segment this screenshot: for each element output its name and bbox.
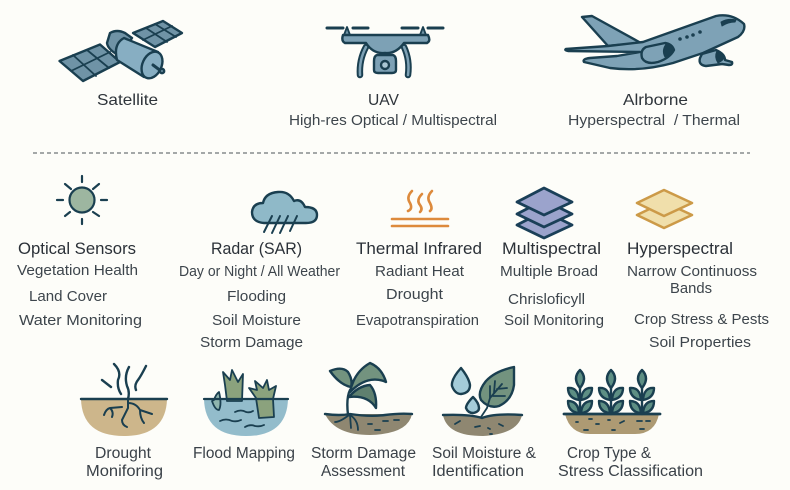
icon: flood mapping — [204, 370, 288, 436]
label: airborne: Alrborne — [623, 92, 688, 109]
label: storm damage assessment — [311, 445, 416, 480]
label: drought monitoring: Moniforing — [86, 463, 163, 480]
icon: UAV drone — [327, 27, 443, 75]
column: optical sensors: Land Cover — [29, 288, 107, 305]
text: UAV sensors: High-res Optical / Multispectral — [289, 112, 497, 129]
column: radar: Radar (SAR) — [211, 239, 302, 258]
icon: crop rows — [564, 370, 660, 434]
icon: thermal heat — [392, 191, 448, 226]
column: hyperspectral: Hyperspectral — [627, 239, 733, 258]
label: crop type and stress classification: Stress Classification — [558, 463, 703, 480]
icon: sun — [57, 176, 107, 224]
column: hyperspectral: Narrow Continuoss — [627, 263, 757, 280]
column: multispectral — [500, 239, 604, 329]
text: airborne sensors: Hyperspectral / Thermal — [568, 112, 740, 129]
column: optical sensors: Vegetation Health — [17, 262, 138, 279]
column: optical sensors: Water Monitoring — [19, 312, 142, 329]
icon: soil moisture — [443, 367, 522, 436]
label: drought monitoring — [86, 445, 163, 480]
label: UAV: UAV — [368, 92, 399, 109]
label: soil moisture and identification: Soil Moisture & — [432, 445, 537, 462]
column: thermal infrared — [356, 239, 482, 329]
label: drought monitoring: Drought — [95, 445, 152, 462]
label: crop type and stress classification — [558, 445, 703, 480]
column: radar — [179, 239, 340, 351]
column: radar: Day or Night / All Weather — [179, 263, 340, 280]
column: thermal infrared: Thermal Infrared — [356, 239, 482, 258]
column: multispectral: Chrisloficyll — [508, 291, 585, 308]
icon: hyperspectral layers — [637, 190, 692, 228]
icon: satellite — [60, 21, 182, 82]
label: soil moisture and identification — [432, 445, 537, 480]
column: hyperspectral — [627, 239, 769, 351]
column: radar: Soil Moisture — [212, 312, 301, 329]
column: optical sensors — [17, 239, 142, 329]
label: soil moisture and identification: Identification — [432, 463, 524, 480]
label: storm damage assessment: Assessment — [321, 463, 406, 480]
column: multispectral: Multispectral — [502, 239, 601, 258]
column: thermal infrared: Evapotranspiration — [356, 312, 479, 329]
column: thermal infrared: Radiant Heat — [375, 263, 465, 280]
column: radar: Storm Damage — [200, 334, 303, 351]
label: storm damage assessment: Storm Damage — [311, 445, 416, 462]
icon: rain cloud — [252, 192, 317, 233]
label: flood mapping: Flood Mapping — [193, 445, 295, 462]
icon: airborne plane — [565, 15, 744, 69]
label: satellite: Satellite — [97, 92, 158, 109]
column: hyperspectral: Crop Stress & Pests — [634, 311, 769, 328]
column: multispectral: Soil Monitoring — [504, 312, 604, 329]
column: radar: Flooding — [227, 288, 286, 305]
column: hyperspectral: Bands — [670, 280, 712, 297]
column: thermal infrared: Drought — [386, 286, 444, 303]
label: crop type and stress classification: Crop Type & — [567, 445, 652, 462]
column: multispectral: Multiple Broad — [500, 263, 598, 280]
column: hyperspectral: Soil Properties — [649, 334, 751, 351]
icon: multispectral layers — [517, 188, 572, 238]
column: optical sensors: Optical Sensors — [18, 239, 136, 258]
icon: storm damage plant — [325, 363, 412, 435]
icon: drought roots — [81, 364, 167, 436]
